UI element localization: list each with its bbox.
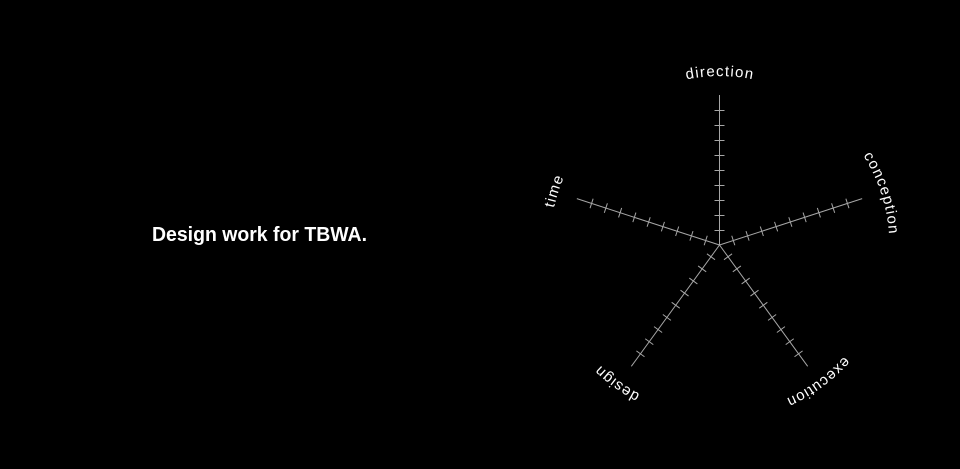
label: time: time	[544, 176, 563, 207]
axis: conception	[718, 194, 864, 250]
axis: design	[627, 242, 724, 369]
axis: direction	[714, 95, 724, 245]
label: execution: execution	[787, 358, 848, 405]
label: conception: conception	[864, 153, 898, 233]
radar chart	[544, 66, 898, 405]
label: direction: direction	[686, 66, 752, 79]
title: Design work for TBWA.	[152, 223, 367, 246]
axis: execution	[715, 242, 812, 369]
label: design: design	[596, 366, 639, 401]
axis: time	[575, 194, 721, 250]
